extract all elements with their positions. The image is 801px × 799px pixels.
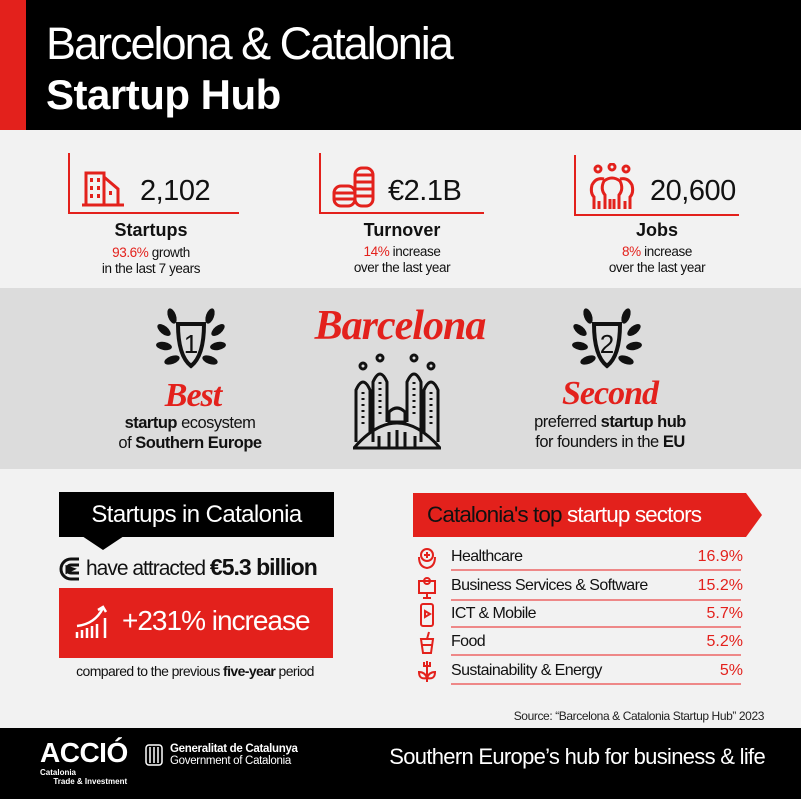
stat: jobs (574, 155, 739, 275)
icon: laurel 1: 1 (184, 329, 198, 359)
text: best: startup ecosystem (125, 414, 255, 432)
text: second (534, 413, 686, 451)
description: 8% increase (622, 244, 692, 259)
row: sustainability (418, 661, 743, 685)
text: best: of Southern Europe (118, 434, 262, 452)
icon: coins (332, 166, 374, 208)
row: food (420, 632, 743, 656)
text: best (118, 414, 262, 452)
description: over the last year (609, 260, 705, 275)
text: increase: +231% increase (122, 605, 310, 636)
description: 93.6% growth (112, 245, 190, 260)
logo: Generalitat: Generalitat de Catalunya (170, 743, 298, 755)
logo: Generalitat: Government of Catalonia (170, 755, 291, 767)
text: second: for founders in the EU (535, 433, 685, 451)
icon: Sagrada Familia (353, 354, 441, 450)
label: Jobs (636, 220, 678, 240)
header (0, 0, 801, 130)
row: sustainability: Sustainability & Energy (451, 662, 602, 679)
row: healthcare (418, 548, 743, 571)
tagline: Southern Europe’s hub for business & life (389, 744, 765, 769)
row: business services: Business Services & Software (451, 577, 648, 594)
description (102, 245, 200, 276)
heading box (59, 492, 334, 537)
number: 20,600 (650, 175, 736, 207)
panel: startups in Catalonia (59, 492, 334, 679)
label: Startups (114, 220, 188, 240)
label: Turnover (364, 220, 440, 240)
red accent strip (0, 0, 26, 130)
logo: ACCIÓ: Catalonia (40, 768, 76, 777)
icon: growth chart (76, 605, 107, 638)
row: food: 5.2% (707, 633, 743, 650)
logo: ACCIÓ (40, 737, 128, 786)
title: Barcelona & Catalonia (46, 18, 452, 69)
row: ICT: 5.7% (707, 605, 743, 622)
heading: Barcelona: Barcelona (315, 303, 485, 349)
stat: startups (68, 153, 239, 276)
icon: laurel 2 (572, 308, 642, 368)
text: second: preferred startup hub (534, 413, 686, 431)
number: 2,102 (140, 175, 210, 207)
panel: top sectors (413, 493, 762, 685)
heading: Best: Best (165, 377, 221, 414)
row: ICT (420, 603, 743, 628)
row: sustainability: 5% (720, 662, 743, 679)
row: ICT: ICT & Mobile (451, 605, 536, 622)
heading box: Startups in Catalonia (91, 501, 302, 528)
footer (0, 728, 801, 799)
row: food: Food (451, 633, 485, 650)
icon: laurel 1 (156, 308, 226, 368)
icon: people (590, 163, 634, 209)
red callout (59, 588, 333, 658)
heading banner (413, 493, 762, 537)
logo: Generalitat (145, 743, 298, 767)
source note: Source: “Barcelona & Catalonia Startup Hub” 2023 (514, 709, 764, 723)
icon: laurel 2: 2 (600, 329, 614, 359)
subtitle: Startup Hub (46, 71, 281, 118)
text: comparison: compared to the previous five-year period (76, 663, 314, 679)
stat: turnover (319, 153, 484, 275)
row: business services: 15.2% (698, 577, 743, 594)
description: over the last year (354, 260, 450, 275)
icon: buildings (82, 172, 124, 206)
description (354, 244, 450, 275)
description: 14% increase (363, 244, 440, 259)
heading: Second: Second (562, 375, 658, 412)
logo: ACCIÓ: ACCIÓ (40, 737, 128, 768)
pointer (82, 536, 124, 550)
panel: top sectors: Catalonia's top startup sectors (427, 502, 701, 527)
row: healthcare: 16.9% (698, 548, 743, 565)
description (609, 244, 706, 275)
description: in the last 7 years (102, 261, 200, 276)
number: €2.1B (388, 175, 461, 207)
icon: magnet (60, 558, 79, 580)
panel: rankings band (0, 288, 801, 469)
row: healthcare: Healthcare (451, 548, 522, 565)
logo: ACCIÓ: Trade & Investment (53, 777, 127, 786)
row: business services (418, 577, 743, 601)
text: attracted: have attracted €5.3 billion (86, 554, 317, 580)
